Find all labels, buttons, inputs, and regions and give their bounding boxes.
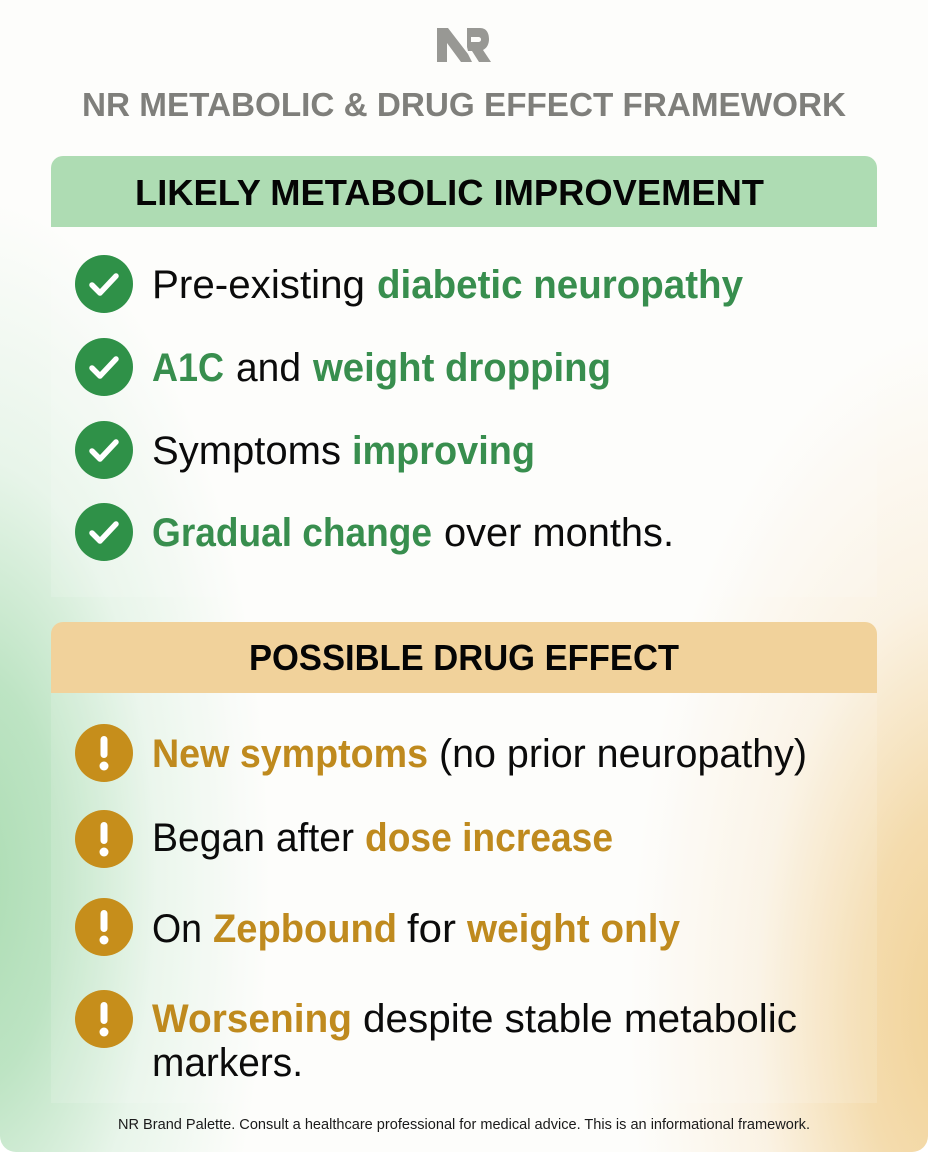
item: worsening bbox=[75, 990, 797, 1085]
title: NR METABOLIC & DRUG EFFECT FRAMEWORK bbox=[82, 86, 846, 123]
item: diabetic neuropathy bbox=[75, 255, 744, 313]
item: zepbound weight only: On bbox=[152, 907, 202, 951]
item: gradual change bbox=[75, 503, 674, 561]
item: symptoms improving: Symptoms bbox=[152, 429, 341, 473]
item: diabetic neuropathy: Pre-existing bbox=[152, 263, 365, 307]
item: zepbound weight only: for bbox=[407, 907, 456, 951]
footer note: NR Brand Palette. Consult a healthcare professional for medical advice. This is an informational framework. bbox=[118, 1117, 810, 1133]
panel body: amber bbox=[51, 693, 877, 1103]
item: diabetic neuropathy: diabetic neuropathy bbox=[377, 263, 744, 307]
item: symptoms improving bbox=[75, 421, 535, 479]
item: A1C and weight: weight dropping bbox=[312, 346, 611, 390]
panel header: green bbox=[51, 156, 877, 227]
item: A1C and weight: A1C bbox=[152, 346, 224, 390]
item: dose increase: dose increase bbox=[365, 816, 613, 860]
item: zepbound weight only: weight only bbox=[466, 907, 681, 951]
panel: possible drug effect bbox=[51, 622, 877, 1103]
item: worsening: despite stable metabolic bbox=[363, 997, 797, 1041]
item: gradual change: Gradual change bbox=[152, 511, 432, 555]
item: zepbound weight only: Zepbound bbox=[213, 907, 397, 951]
item: new symptoms bbox=[75, 724, 807, 782]
item: dose increase: Began after bbox=[152, 816, 354, 860]
panel: likely metabolic improvement bbox=[51, 156, 877, 597]
item: new symptoms: (no prior neuropathy) bbox=[439, 732, 807, 776]
item: zepbound weight only bbox=[75, 898, 681, 956]
item: dose increase bbox=[75, 810, 613, 868]
heading: possible drug effect: POSSIBLE DRUG EFFECT bbox=[249, 637, 679, 678]
item: worsening: markers. bbox=[152, 1041, 303, 1085]
panel body: green bbox=[51, 227, 877, 597]
heading: likely metabolic improvement: LIKELY METABOLIC IMPROVEMENT bbox=[135, 172, 764, 213]
item: worsening: Worsening bbox=[152, 997, 352, 1041]
panel header: amber bbox=[51, 622, 877, 693]
item: new symptoms: New symptoms bbox=[152, 732, 428, 776]
item: symptoms improving: improving bbox=[352, 429, 535, 473]
item: A1C and weight bbox=[75, 338, 611, 396]
item: gradual change: over months. bbox=[444, 511, 674, 555]
logo: NR monogram bbox=[437, 28, 491, 62]
item: A1C and weight: and bbox=[236, 346, 301, 390]
